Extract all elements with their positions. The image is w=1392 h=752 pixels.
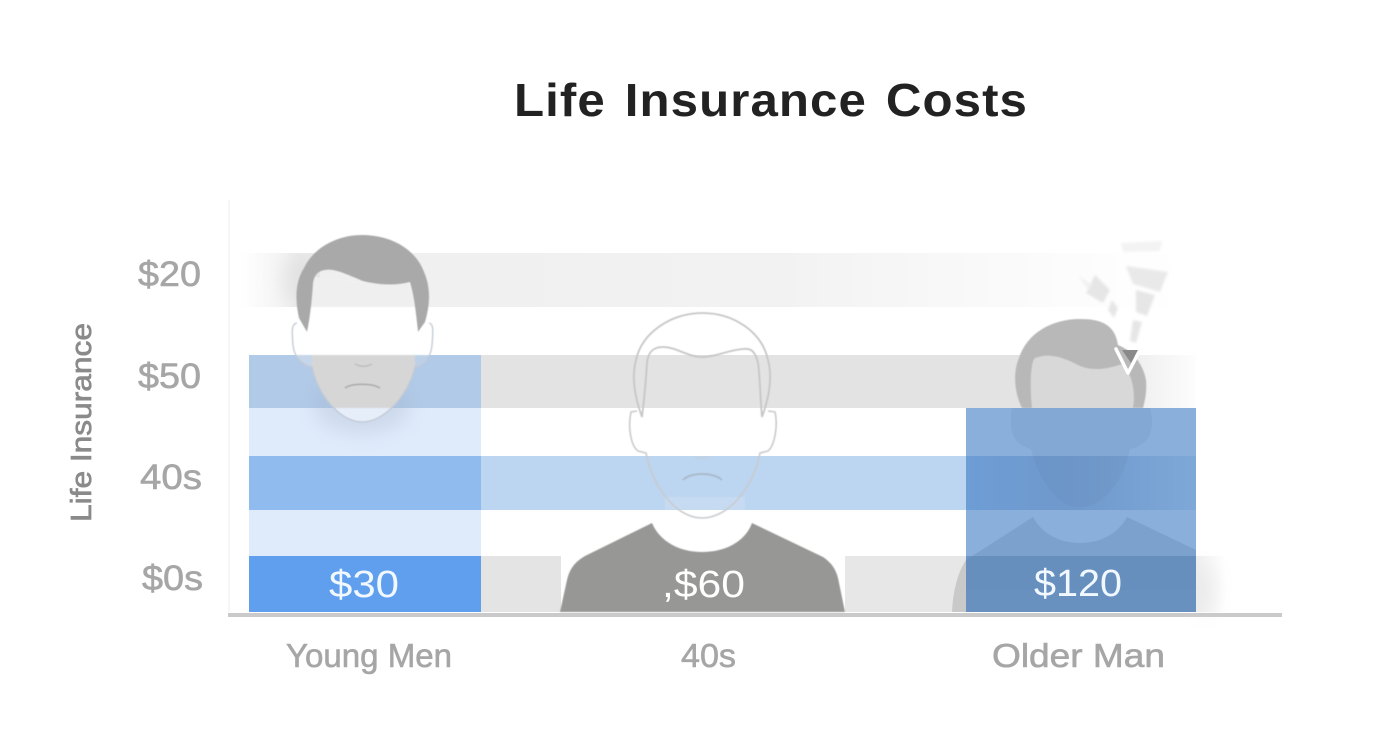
bar: older man [966,408,1196,612]
bar value labels [329,563,1122,606]
y-axis tick labels: 40s [140,458,202,497]
x-axis category labels: 40s [681,637,736,674]
bar value labels: ,$60 [662,564,745,606]
bar: young men [249,355,481,612]
icon: signal wedges and marker [1078,241,1168,373]
y-axis title: Life Insurance [66,323,98,522]
x-axis category labels [286,637,1165,674]
y-axis tick labels [138,255,203,598]
x-axis baseline [228,613,1282,617]
icon: older man silhouette through bar [972,517,1196,556]
x-axis category labels: Young Men [286,637,452,674]
y-axis tick labels: $50 [138,357,201,396]
x-axis category labels: Older Man [992,637,1165,674]
horizontal bands [228,200,1226,612]
bar value labels: $120 [1034,563,1122,605]
title: Life Insurance Costs [514,74,1028,126]
y-axis tick labels: $0s [142,559,203,598]
y-axis tick labels: $20 [138,255,201,294]
icon: older man (behind bar) [952,318,1147,612]
icon: middle-aged man [560,313,845,612]
bar value labels: $30 [329,564,399,606]
icon: young man head [283,235,440,433]
